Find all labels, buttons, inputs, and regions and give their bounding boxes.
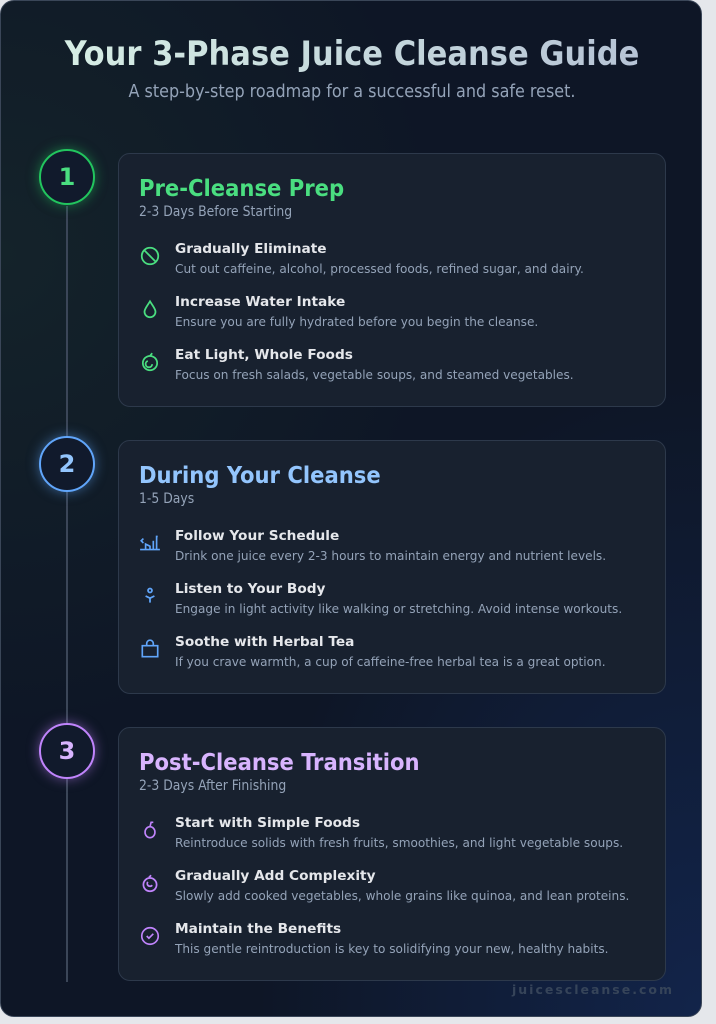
item: tea: Soothe with Herbal Tea xyxy=(175,634,354,650)
panel: pre-cleanse xyxy=(118,153,666,407)
heading: Pre-Cleanse Prep xyxy=(139,174,344,202)
item: water: Increase Water Intake xyxy=(175,294,345,310)
item: complexity: Gradually Add Complexity xyxy=(175,868,376,884)
item: eliminate xyxy=(140,241,584,276)
step 1 circle xyxy=(39,149,95,205)
icon: person xyxy=(145,588,155,603)
item: eliminate: Gradually Eliminate xyxy=(175,241,327,257)
item: eliminate: Cut out caffeine, alcohol, processed foods, refined sugar, and dairy. xyxy=(175,262,584,276)
step 3 circle xyxy=(39,723,95,779)
timeline line xyxy=(66,206,68,982)
heading: During Your Cleanse xyxy=(139,461,381,489)
item: body xyxy=(145,581,622,616)
icon: check xyxy=(140,926,160,946)
icon: fruit xyxy=(144,822,156,838)
step 1 circle: 1 xyxy=(59,163,75,191)
step 2 circle: 2 xyxy=(59,450,75,478)
panel: during cleanse xyxy=(118,440,666,694)
item: body: Engage in light activity like walking or stretching. Avoid intense workouts. xyxy=(175,602,622,616)
item: schedule: Drink one juice every 2-3 hours to maintain energy and nutrient levels. xyxy=(175,549,606,563)
item: light foods: Focus on fresh salads, vegetable soups, and steamed vegetables. xyxy=(175,368,574,382)
panel: post-cleanse xyxy=(118,727,666,981)
icon: ban xyxy=(140,246,160,266)
subtitle: A step-by-step roadmap for a successful and safe reset. xyxy=(129,81,575,102)
icon: swirl xyxy=(142,874,158,892)
icon: bag xyxy=(141,639,159,658)
item: simple foods xyxy=(144,815,623,850)
subheading: 1-5 Days xyxy=(139,491,194,507)
item: benefits xyxy=(140,921,608,956)
title: Your 3-Phase Juice Cleanse Guide xyxy=(65,34,639,74)
item: simple foods: Reintroduce solids with fresh fruits, smoothies, and light vegetable soups. xyxy=(175,836,623,850)
item: schedule: Follow Your Schedule xyxy=(175,528,339,544)
item: complexity xyxy=(142,868,629,903)
item: simple foods: Start with Simple Foods xyxy=(175,815,360,831)
item: tea: If you crave warmth, a cup of caffeine-free herbal tea is a great option. xyxy=(175,655,606,669)
item: body: Listen to Your Body xyxy=(175,581,325,597)
subheading: 2-3 Days After Finishing xyxy=(139,778,286,794)
item: benefits: Maintain the Benefits xyxy=(175,921,341,937)
item: complexity: Slowly add cooked vegetables, whole grains like quinoa, and lean proteins. xyxy=(175,889,629,903)
footer: juicescleanse.com xyxy=(512,982,674,997)
subheading: 2-3 Days Before Starting xyxy=(139,204,292,220)
item: benefits: This gentle reintroduction is key to solidifying your new, healthy habits. xyxy=(175,942,608,956)
heading: Post-Cleanse Transition xyxy=(139,748,420,776)
icon: leaf xyxy=(142,352,158,372)
step 3 circle: 3 xyxy=(59,737,75,765)
item: light foods: Eat Light, Whole Foods xyxy=(175,347,353,363)
icon: schedule xyxy=(140,536,160,550)
item: water xyxy=(144,294,538,329)
step 2 circle xyxy=(39,436,95,492)
icon: drop xyxy=(144,300,156,318)
item: schedule xyxy=(140,528,606,563)
item: tea xyxy=(141,634,606,669)
item: light foods xyxy=(142,347,574,382)
item: water: Ensure you are fully hydrated before you begin the cleanse. xyxy=(175,315,538,329)
